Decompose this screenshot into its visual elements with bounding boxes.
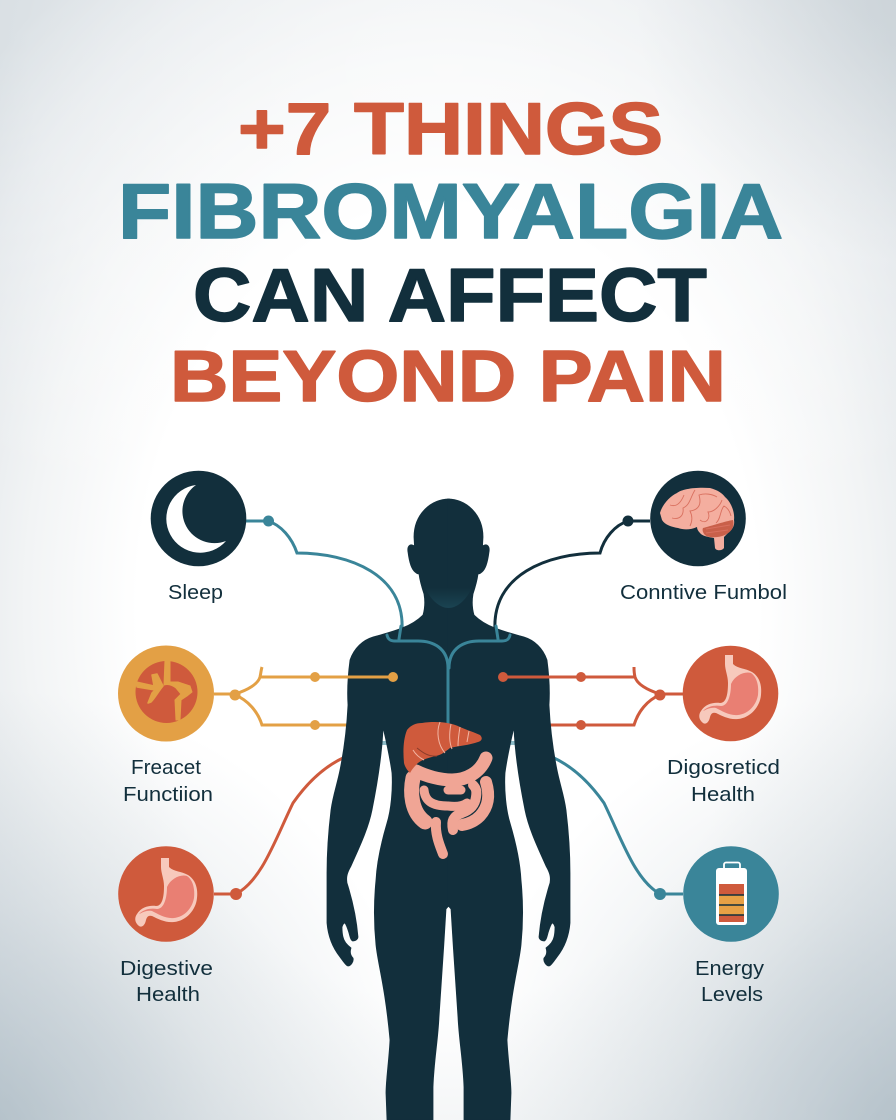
label: left middle xyxy=(123,756,213,806)
icon: stomach left xyxy=(118,846,214,942)
icon: battery xyxy=(683,846,779,942)
connector: sleep to body xyxy=(246,516,402,639)
label: left middle: Functiion xyxy=(123,783,213,806)
label: cognitive function: Conntive Fumbol xyxy=(620,581,787,604)
title line: CAN AFFECT: CAN AFFECT xyxy=(193,253,707,337)
connector: lower right red branch xyxy=(545,695,660,730)
label: energy levels xyxy=(695,957,765,1006)
title xyxy=(118,89,783,417)
label: right middle xyxy=(667,756,780,806)
label: digestive health: Health xyxy=(136,983,200,1006)
label: right middle: Health xyxy=(691,783,755,806)
label: energy levels: Levels xyxy=(701,983,763,1006)
label: energy levels: Energy xyxy=(695,957,765,980)
liver xyxy=(403,722,482,773)
label: digestive health xyxy=(120,957,213,1006)
label: left middle: Freacet xyxy=(131,756,201,779)
connector: cognitive function to body xyxy=(495,516,650,630)
armpit line fragments xyxy=(378,741,519,745)
cerebellum xyxy=(703,520,734,537)
connector: upper right red branch xyxy=(498,667,683,700)
title line: FIBROMYALGIA: FIBROMYALGIA xyxy=(118,167,783,255)
label: right middle: Digosreticd xyxy=(667,756,780,779)
intestines xyxy=(412,758,488,854)
icon: orange circle with cracked disc xyxy=(118,646,214,742)
connector: upper left orange branch xyxy=(214,667,398,700)
labels xyxy=(120,581,787,1006)
title line: +7 THINGS: +7 THINGS xyxy=(238,89,663,170)
body silhouette xyxy=(327,499,570,1120)
label: sleep: Sleep xyxy=(168,581,223,604)
title line: BEYOND PAIN: BEYOND PAIN xyxy=(170,337,726,417)
brain folds xyxy=(670,490,731,533)
icon: brain xyxy=(650,471,746,566)
icon: stomach right xyxy=(683,646,778,741)
chin highlight xyxy=(425,588,472,608)
icon: sleep moon xyxy=(151,471,246,566)
connector: digestive health to body xyxy=(214,757,345,900)
liver lobes xyxy=(413,722,469,760)
chest nerve lines xyxy=(387,626,510,724)
connector: energy levels to body xyxy=(552,757,683,900)
connector: lower left orange branch xyxy=(235,695,352,730)
label: digestive health: Digestive xyxy=(120,957,213,980)
